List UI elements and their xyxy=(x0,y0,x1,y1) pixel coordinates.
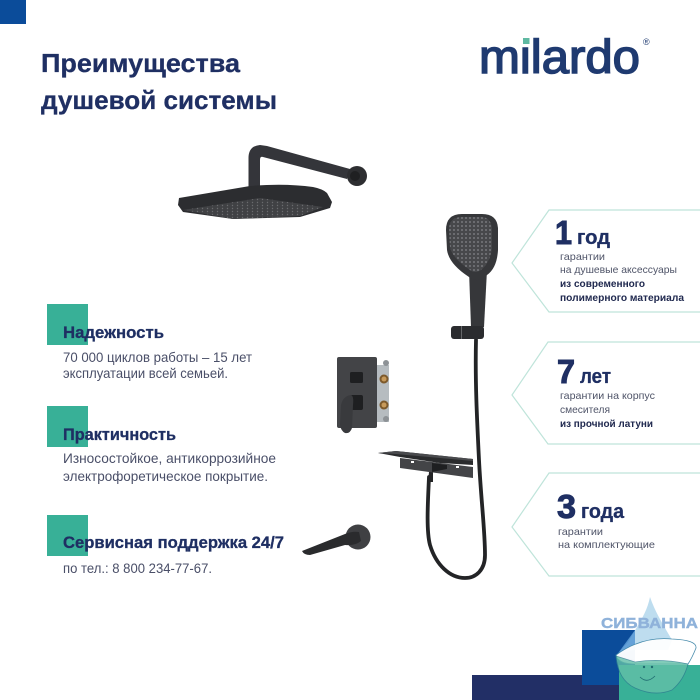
panel: practicality: Износостойкое, антикоррозийное xyxy=(63,450,276,466)
panel: 7 years warranty: лет xyxy=(580,366,611,388)
panel: 1 year warranty: на душевые аксессуары xyxy=(560,264,677,276)
corner square xyxy=(0,0,26,24)
panel: practicality: электрофоретическое покрытие. xyxy=(63,468,268,484)
panel: 3 years warranty: года xyxy=(581,501,625,523)
panel: service support xyxy=(47,515,284,576)
panel: 1 year warranty: 1 xyxy=(555,214,572,251)
watermark: Sibvanna logo: СИБВАННА xyxy=(601,615,698,632)
title: душевой системы xyxy=(41,85,277,115)
panel: 7 years warranty: 7 xyxy=(557,353,575,390)
icon: concealed mixer xyxy=(337,357,389,433)
panel: 3 years warranty: на комплектующие xyxy=(558,539,655,551)
title: Преимущества xyxy=(41,48,241,78)
panel: reliability xyxy=(47,304,253,381)
panel: reliability: 70 000 циклов работы – 15 лет xyxy=(63,349,253,365)
panel: 7 years warranty: из прочной латуни xyxy=(560,418,653,430)
panel: practicality xyxy=(47,406,276,484)
panel: 3 years warranty: гарантии xyxy=(558,526,603,538)
watermark: Sibvanna logo xyxy=(601,597,698,693)
icon: overhead shower xyxy=(178,145,367,219)
title xyxy=(41,48,277,115)
logo: milardo: milardo xyxy=(479,30,640,83)
icon: hand shower and hose xyxy=(428,214,498,578)
corner blocks xyxy=(472,630,700,700)
panel: 1 year warranty: из современного xyxy=(560,278,645,290)
panel: 7 years warranty xyxy=(512,342,700,444)
panel: service support: по тел.: 8 800 234-77-67. xyxy=(63,560,212,576)
panel: 1 year warranty: полимерного материала xyxy=(560,292,684,304)
panel: practicality: Практичность xyxy=(63,425,176,444)
panel: 7 years warranty: гарантии на корпус xyxy=(560,390,655,402)
panel: 3 years warranty xyxy=(512,473,700,576)
panel: service support: Сервисная поддержка 24/7 xyxy=(63,533,284,552)
panel: 7 years warranty: смесителя xyxy=(560,404,610,416)
icon: bath spout xyxy=(302,524,370,555)
panel: 1 year warranty: гарантии xyxy=(560,251,605,263)
panel: reliability: эксплуатации всей семьей. xyxy=(63,365,228,381)
panel: reliability: Надежность xyxy=(63,323,164,342)
panel: 1 year warranty: год xyxy=(577,227,610,249)
logo: milardo: ® xyxy=(643,37,650,47)
panel: 1 year warranty xyxy=(512,210,700,312)
icon: shelf xyxy=(378,451,473,482)
panel: 3 years warranty: 3 xyxy=(557,488,576,525)
